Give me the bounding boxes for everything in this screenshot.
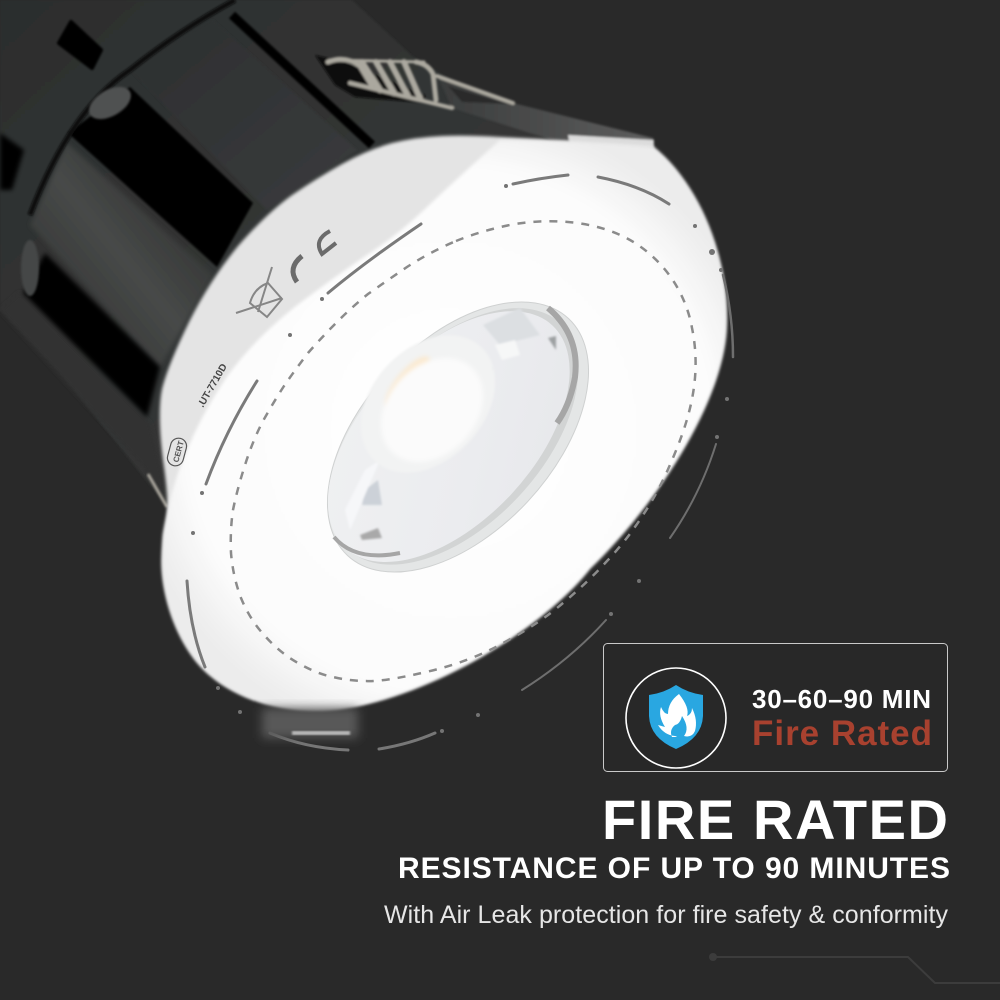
badge duration text: 30–60–90 MIN [752, 684, 931, 714]
mark: CE arc C [293, 256, 302, 282]
housing tab [84, 80, 136, 126]
mark: CE arc E [319, 231, 336, 254]
housing band stripe [232, 15, 372, 145]
lens facets [345, 308, 556, 540]
lens grey arc upper right [548, 308, 576, 423]
mark: crossed-out bin [236, 267, 282, 317]
subheading: RESISTANCE OF UP TO 90 MINUTES [398, 852, 950, 885]
lens grey arc lower left [334, 537, 400, 555]
strap window [448, 86, 508, 104]
housing black channel [68, 87, 253, 267]
lens assembly [278, 254, 638, 620]
recessed light housing [0, 0, 560, 510]
LED centre dome [334, 309, 522, 499]
heading: FIRE RATED [602, 788, 948, 851]
housing left tab [21, 240, 39, 296]
model number: .UT-7710D [196, 362, 230, 410]
housing lower panel [30, 143, 213, 367]
white flange side wall [160, 136, 726, 711]
badge panel [604, 644, 948, 772]
badge icon: shield with flame [626, 668, 726, 768]
lower clip under flange [262, 708, 358, 738]
outer solid arc segments [187, 175, 733, 750]
housing ring groove [30, 0, 235, 215]
housing upper panel [130, 20, 357, 210]
lens inner ring [284, 263, 625, 610]
white flange front face [162, 140, 726, 711]
clip highlight [292, 731, 350, 735]
coils [328, 59, 513, 108]
lens outer ring [278, 254, 638, 620]
certification marks [236, 231, 336, 317]
housing lower black slot [23, 253, 160, 417]
ring dots [191, 184, 729, 733]
lens glass [283, 267, 615, 606]
LED warm glow [379, 350, 437, 414]
badge fire rated text: Fire Rated [752, 714, 932, 753]
circled logo on wall [166, 436, 188, 468]
strap tip [568, 135, 654, 149]
strap [437, 75, 655, 148]
housing lower grey band [0, 292, 170, 507]
spring shadow [315, 55, 425, 103]
dashed ring on flange [231, 221, 696, 681]
housing top slot [59, 22, 101, 68]
housing metal streak [148, 474, 167, 507]
description: With Air Leak protection for fire safety & conformity [384, 901, 948, 929]
spring clip [315, 55, 655, 149]
logo text: CERT [172, 440, 186, 463]
housing left shadow [0, 133, 24, 190]
faint circuit line [709, 953, 1000, 983]
LED white core [360, 338, 504, 482]
